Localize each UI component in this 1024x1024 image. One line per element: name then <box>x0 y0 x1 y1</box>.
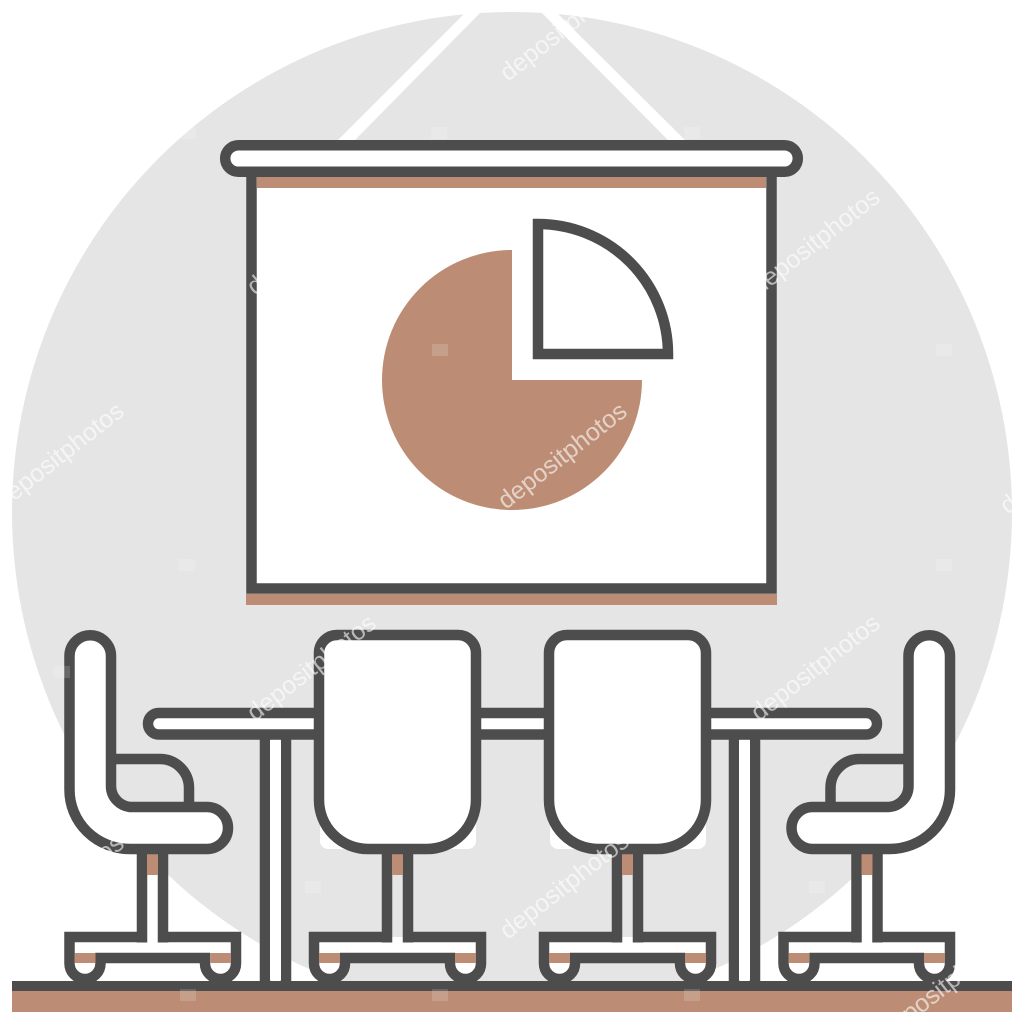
floor <box>12 981 1012 1012</box>
watermarks: depositphotos <box>494 827 634 945</box>
right hanging string <box>542 13 685 140</box>
watermarks: depositphotos <box>492 397 632 515</box>
watermarks: depositphotos <box>241 183 381 301</box>
chair: centre left back view <box>314 635 481 979</box>
chair stem <box>856 849 878 942</box>
wheel accents <box>788 953 945 963</box>
table right leg <box>734 734 755 981</box>
chair: left side view <box>70 635 236 979</box>
screen top shadow strip <box>257 177 766 188</box>
chair stem <box>617 849 638 942</box>
chair base <box>544 937 711 979</box>
screen roller bar <box>225 145 798 172</box>
chair: right side view <box>784 635 950 979</box>
white offset behind back <box>550 800 706 849</box>
table left leg fill <box>270 740 281 980</box>
chair stem <box>142 849 163 942</box>
wheel accents <box>319 953 476 963</box>
floor line <box>12 981 1012 991</box>
panel: projection screen <box>225 145 798 605</box>
watermarks: depositphotos <box>745 183 885 301</box>
chart: pie detached slice <box>538 224 668 354</box>
screen bottom shadow strip <box>246 594 777 605</box>
chair stem <box>387 849 408 942</box>
stem accent <box>392 854 403 875</box>
seat and back <box>792 635 950 849</box>
stem accent <box>622 854 633 875</box>
chair back <box>319 635 476 849</box>
chair: centre right back view <box>544 635 711 979</box>
screen canvas <box>252 172 772 588</box>
chair base <box>314 937 481 979</box>
armrest <box>111 759 189 807</box>
stem accent <box>862 854 872 875</box>
table <box>148 713 877 981</box>
table left leg <box>265 734 286 981</box>
floor band <box>12 991 1012 1012</box>
wheel accents <box>74 953 231 963</box>
table top <box>148 713 877 734</box>
table right leg fill <box>739 740 750 980</box>
left hanging string <box>338 13 480 140</box>
chart: pie main portion <box>382 250 642 510</box>
stem accent <box>147 854 158 875</box>
armrest <box>830 759 908 807</box>
watermarks: depositphotos <box>241 609 381 727</box>
watermarks: depositphotos <box>745 609 885 727</box>
chair back <box>549 635 706 849</box>
seat and back <box>70 635 228 849</box>
chair base <box>784 937 950 979</box>
chair base <box>70 937 236 979</box>
white offset behind back <box>320 800 476 849</box>
wheel accents <box>549 953 706 963</box>
